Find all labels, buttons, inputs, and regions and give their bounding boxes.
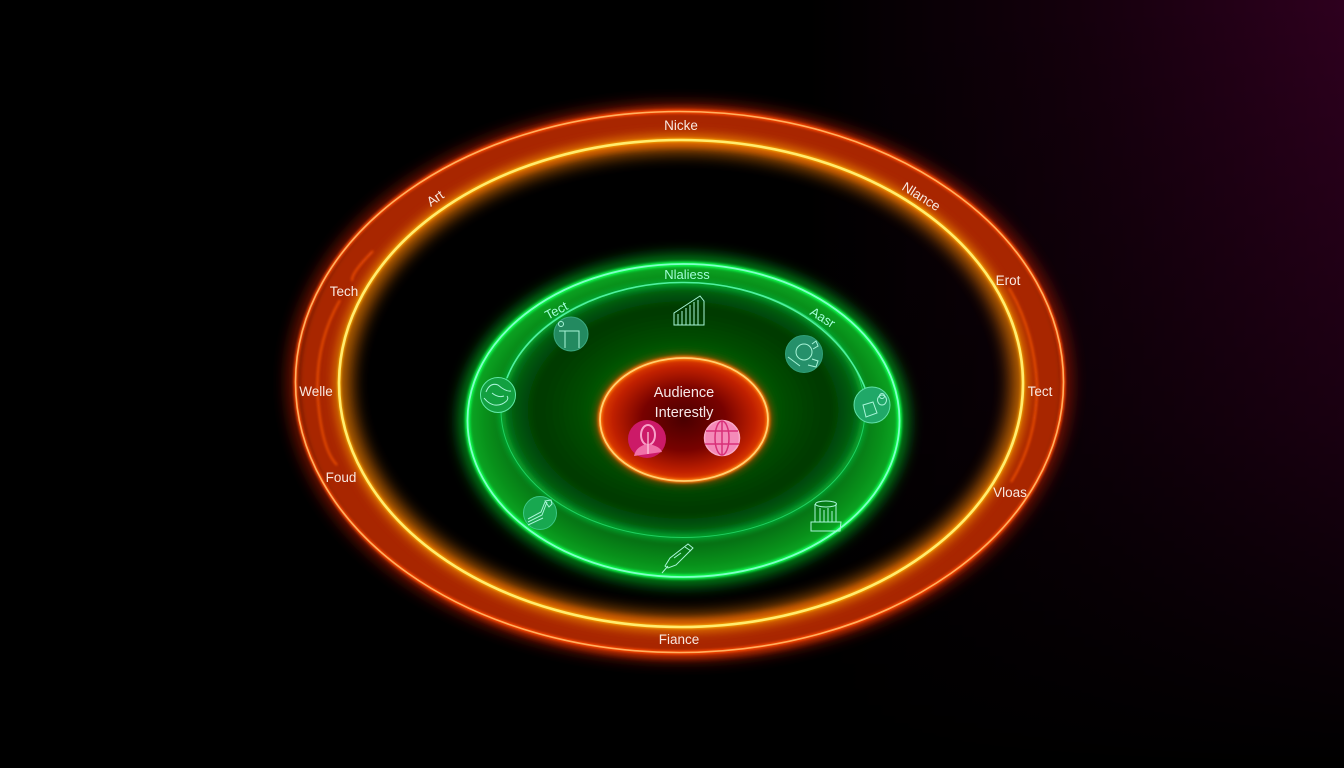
central core: audience interests [598,356,770,482]
orange ring accent arcs [317,251,1037,482]
outer ring labels [299,118,1053,647]
icon: top-hat chart [811,501,841,531]
outer ring labels: Erot [996,273,1021,288]
outer ring labels: Vloas [993,485,1027,500]
central core: audience interests: Interestly [655,405,714,421]
icon: headset disc [786,336,822,372]
outer ring labels: Nicke [664,118,698,133]
icon: globe [704,420,740,456]
outer ring labels: Nlance [899,179,943,214]
icon: person [628,420,666,458]
green ring labels: Tect [542,298,571,323]
outer ring labels: Fiance [659,632,699,647]
outer ring labels: Tech [330,284,358,299]
outer ring labels: Art [424,187,447,210]
icon: brush disc [524,496,556,530]
core label: Audience [654,385,714,401]
icon: doorway disc [554,317,588,351]
green ring labels [542,267,839,331]
green ring icons [480,296,890,573]
green ring labels: Aasr [807,304,839,331]
outer ring labels: Tect [1028,384,1053,399]
icon: documents disc [854,387,890,423]
green ring labels: Nlaliess [664,267,710,282]
icon: pen [662,544,693,573]
outer orange ring [294,110,1064,654]
icon: bar chart [674,296,704,325]
outer ring labels: Welle [299,384,333,399]
icon: map disc [480,378,516,412]
outer ring labels: Foud [326,470,356,485]
green ring band [466,263,900,578]
